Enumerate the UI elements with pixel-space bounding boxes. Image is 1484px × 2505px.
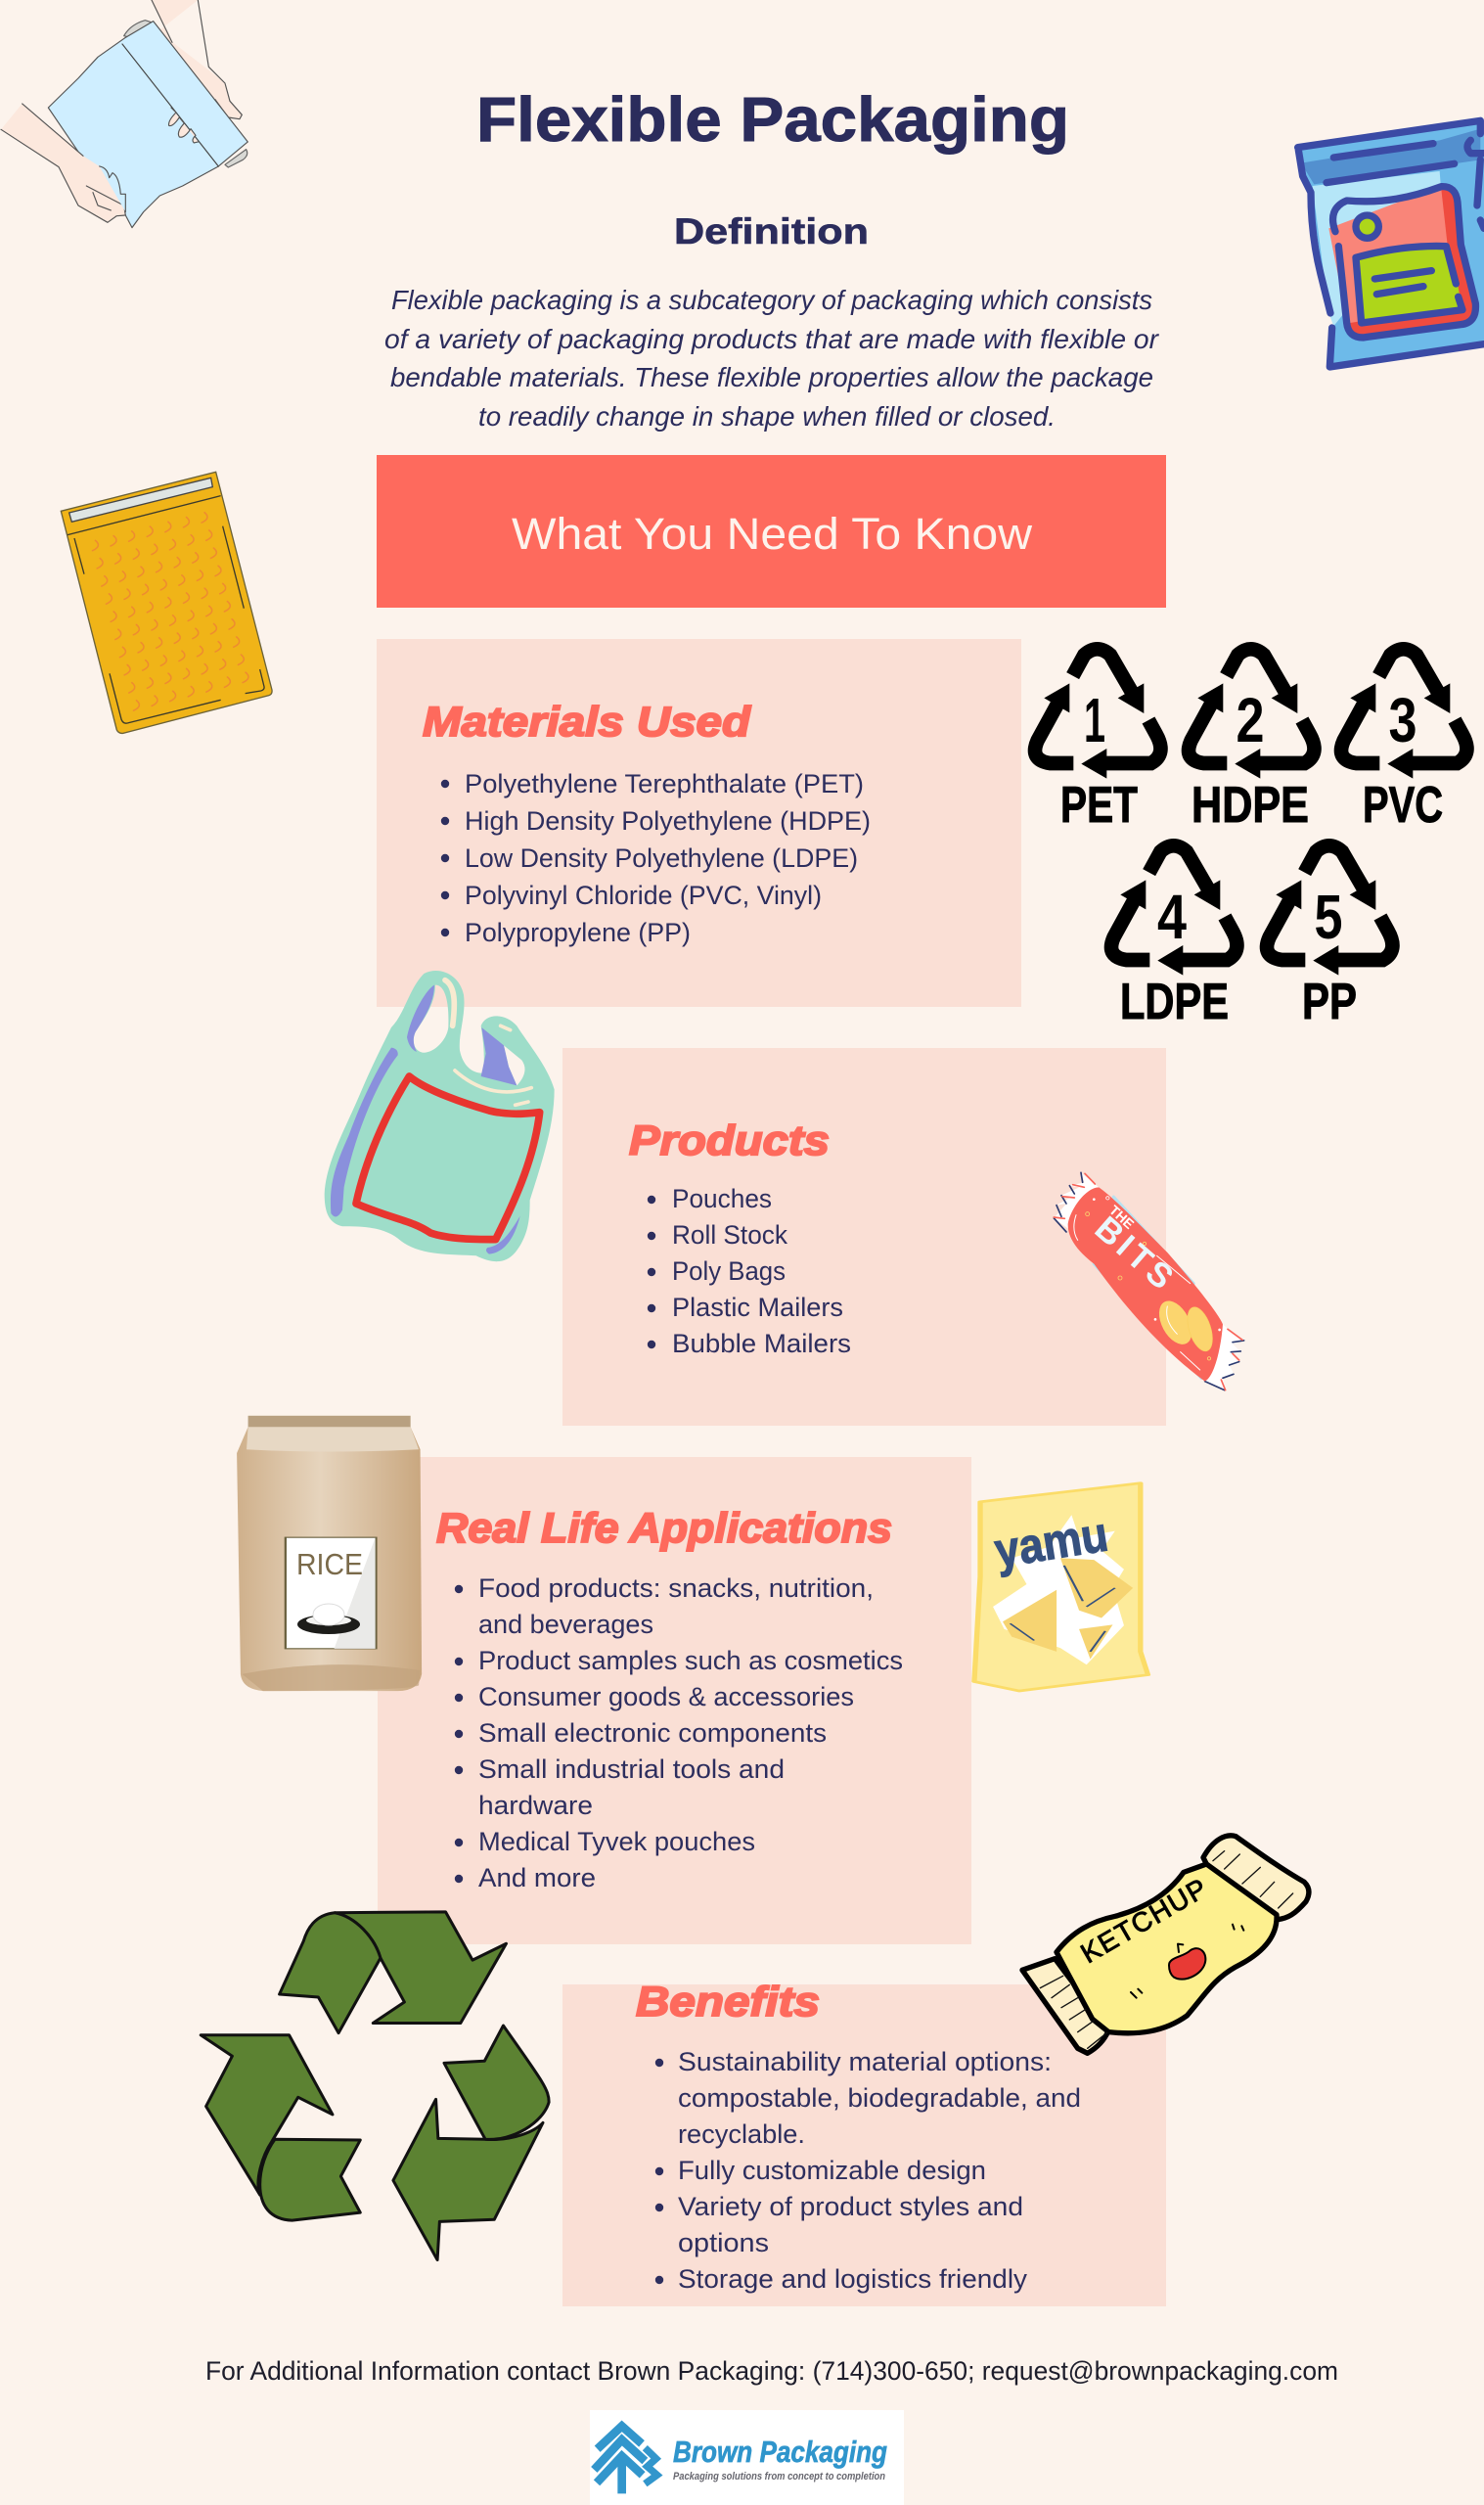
icon: yellow bubble mailer bbox=[61, 472, 272, 733]
list: applications: Small industrial tools and bbox=[478, 1754, 785, 1784]
icon: rice bag bbox=[237, 1416, 422, 1691]
heading: definition: Definition bbox=[674, 211, 869, 251]
list: products bbox=[648, 1184, 851, 1358]
list: products: Poly Bags bbox=[672, 1256, 786, 1286]
heading: products: Products bbox=[629, 1117, 830, 1164]
icon: recycling code 1 PET bbox=[1035, 649, 1160, 834]
banner: what you need to know bbox=[377, 455, 1166, 608]
list: applications: Small electronic components bbox=[478, 1718, 827, 1748]
icon: recycling code 5 PP: PP bbox=[1302, 974, 1357, 1030]
logo wordmark: Brown Packaging bbox=[673, 2435, 887, 2469]
list: benefits: options bbox=[678, 2228, 769, 2257]
definition paragraph: to readily change in shape when filled or closed. bbox=[478, 401, 1056, 432]
definition paragraph: bendable materials. These flexible properties allow the package bbox=[390, 362, 1153, 392]
panel: products bbox=[562, 1048, 1166, 1426]
logo tagline: Packaging solutions from concept to completion bbox=[673, 2471, 885, 2482]
icon: recycling code 2 HDPE: 2 bbox=[1237, 685, 1264, 755]
icon: recycling code 5 PP bbox=[1267, 845, 1392, 1030]
list: applications: Product samples such as cosmetics bbox=[478, 1646, 903, 1675]
list: applications: Food products: snacks, nutrition, bbox=[478, 1573, 874, 1603]
icon: logo tree bbox=[594, 2426, 657, 2493]
list: materials: Polypropylene (PP) bbox=[465, 918, 691, 947]
icon: the bits snack wrapper bbox=[1054, 1172, 1244, 1390]
list: products: Plastic Mailers bbox=[672, 1293, 843, 1322]
label: rice: RICE bbox=[296, 1547, 363, 1581]
list: materials bbox=[441, 769, 871, 947]
banner: what you need to know: What You Need To Know bbox=[512, 509, 1033, 559]
panel: materials used bbox=[377, 639, 1021, 1007]
icon: recycling code 4 LDPE bbox=[1111, 845, 1237, 1030]
icon: recycling code 2 HDPE: HDPE bbox=[1192, 777, 1309, 834]
list: products: Bubble Mailers bbox=[672, 1329, 851, 1358]
list: applications: and beverages bbox=[478, 1610, 653, 1639]
list: products: Roll Stock bbox=[672, 1220, 787, 1250]
list: benefits: Fully customizable design bbox=[678, 2156, 986, 2185]
title: Flexible Packaging bbox=[476, 84, 1069, 155]
label: the bits: THE bbox=[1106, 1202, 1138, 1232]
label: the bits: BITS bbox=[1088, 1209, 1181, 1297]
definition paragraph bbox=[384, 285, 1160, 432]
list: materials: Low Density Polyethylene (LDPE) bbox=[465, 843, 858, 873]
list: products: Pouches bbox=[672, 1184, 772, 1213]
list: benefits bbox=[655, 2047, 1081, 2294]
definition paragraph: Flexible packaging is a subcategory of packaging which consists bbox=[391, 285, 1152, 315]
panel: real life applications bbox=[378, 1457, 971, 1944]
list: benefits: Storage and logistics friendly bbox=[678, 2264, 1028, 2294]
contact line: For Additional Information contact Brown Packaging: (714)300-650; request@brownpackaging.com bbox=[205, 2356, 1338, 2386]
label: ketchup: KETCHUP bbox=[1076, 1873, 1212, 1969]
heading: benefits: Benefits bbox=[636, 1979, 820, 2026]
icon: hands holding film roll bbox=[1, 0, 247, 228]
icon: yamu chip bag bbox=[974, 1483, 1147, 1691]
icon: recycling code 3 PVC bbox=[1341, 649, 1466, 834]
icon: recycling code 2 HDPE bbox=[1189, 649, 1314, 834]
icon: recycling code 5 PP: 5 bbox=[1315, 882, 1342, 952]
icon group: recycling codes bbox=[1035, 649, 1466, 1030]
icon: recycling code 1 PET: PET bbox=[1060, 777, 1138, 834]
icon: recycling symbol bbox=[201, 1912, 549, 2260]
list: applications: Consumer goods & accessories bbox=[478, 1682, 854, 1711]
list: benefits: Variety of product styles and bbox=[678, 2192, 1023, 2221]
label: yamu: yamu bbox=[991, 1506, 1111, 1578]
heading: materials used: Materials Used bbox=[423, 699, 751, 746]
list: applications bbox=[455, 1573, 903, 1892]
panel: benefits bbox=[562, 1979, 1166, 2306]
list: applications: Medical Tyvek pouches bbox=[478, 1827, 755, 1856]
icon: zip pouch bbox=[1296, 120, 1484, 369]
heading: real life applications: Real Life Applications bbox=[436, 1505, 892, 1552]
list: benefits: Sustainability material options: bbox=[678, 2047, 1052, 2076]
icon: ketchup packet bbox=[1022, 1836, 1309, 2053]
icon: recycling code 4 LDPE: 4 bbox=[1157, 882, 1187, 952]
list: applications: hardware bbox=[478, 1791, 593, 1820]
list: benefits: compostable, biodegradable, and bbox=[678, 2083, 1081, 2113]
list: applications: And more bbox=[478, 1863, 596, 1892]
icon: recycling code 3 PVC: PVC bbox=[1363, 777, 1443, 834]
icon: plastic bag bbox=[325, 971, 555, 1261]
icon: recycling code 4 LDPE: LDPE bbox=[1120, 974, 1229, 1030]
list: materials: Polyethylene Terephthalate (PET) bbox=[465, 769, 864, 798]
logo: brown packaging bbox=[590, 2410, 904, 2505]
icon: rice bowl bbox=[297, 1604, 360, 1634]
icon: recycling code 3 PVC: 3 bbox=[1389, 685, 1417, 755]
icon: recycling code 1 PET: 1 bbox=[1084, 685, 1105, 755]
list: materials: High Density Polyethylene (HDPE) bbox=[465, 806, 871, 836]
list: benefits: recyclable. bbox=[678, 2119, 805, 2149]
list: materials: Polyvinyl Chloride (PVC, Vinyl) bbox=[465, 881, 822, 910]
definition paragraph: of a variety of packaging products that are made with flexible or bbox=[384, 324, 1160, 354]
